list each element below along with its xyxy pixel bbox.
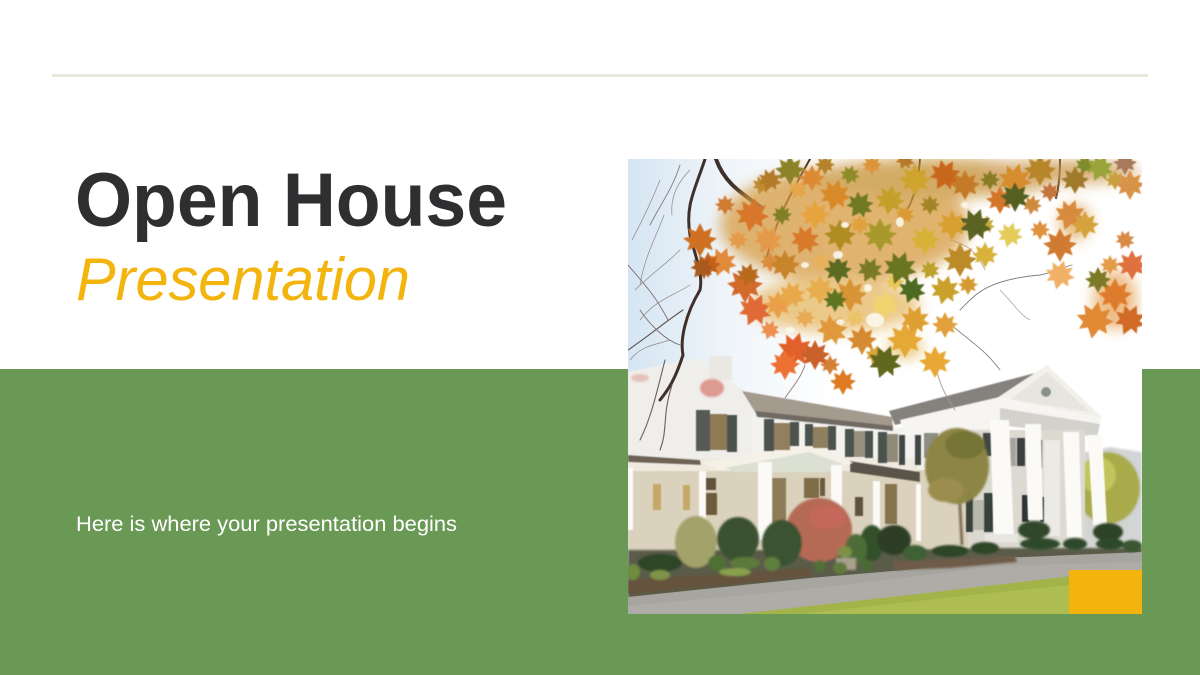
gravel drive and lawn (628, 552, 1142, 606)
portico back wall (960, 430, 1085, 552)
autumn foliage wash (720, 158, 1140, 358)
house (628, 356, 1103, 552)
tagline text: Here is where your presentation begins (76, 513, 457, 536)
bare branches (628, 159, 1072, 450)
central block wall (756, 412, 990, 470)
porch wall (628, 470, 968, 552)
maple leaves: small mottled layer (715, 147, 1138, 375)
columns (628, 420, 1107, 542)
garden shrubs (626, 498, 1142, 594)
entablature (900, 397, 1100, 428)
right roof (888, 372, 1035, 426)
title: Open House (75, 158, 507, 243)
top divider line (52, 74, 1148, 77)
background: white upper area (0, 0, 1200, 369)
pink blossoms on left wing (631, 374, 724, 397)
windows and shutters (653, 410, 1045, 532)
maple leaves (683, 149, 1151, 395)
left wing (628, 358, 753, 459)
background building and right tree (1084, 446, 1142, 551)
leaf gaps showing sky (785, 202, 969, 333)
pediment (994, 365, 1103, 418)
photo: white colonial house under autumn leaves (626, 147, 1151, 614)
title (75, 158, 507, 313)
background: green band (0, 369, 1200, 675)
subtitle: Presentation (76, 246, 410, 313)
middle tree (925, 428, 989, 545)
garden bed base (628, 548, 1142, 600)
middle roof (742, 391, 893, 428)
yellow accent square (1069, 570, 1142, 614)
